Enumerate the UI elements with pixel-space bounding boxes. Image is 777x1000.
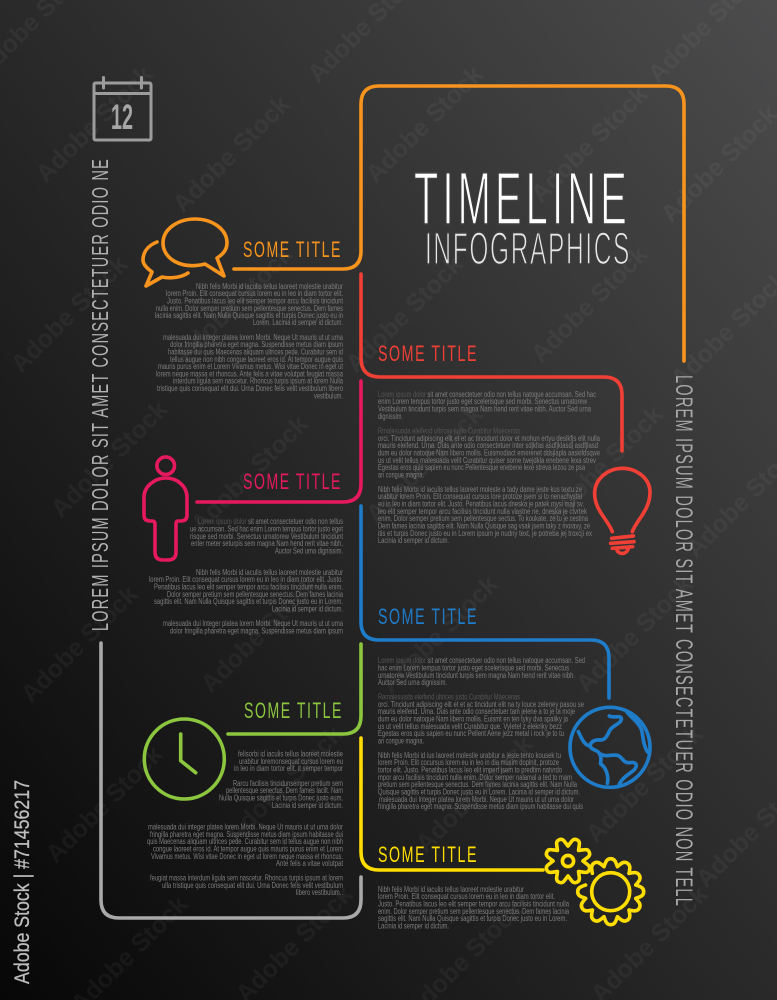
text block: green section: Vivamus metus. Wisi vitae Donec in eget ut lorem neque massa et rhoncus. [151,852,343,861]
text block: orange section: vestibulum. [314,392,343,400]
text block: red section: Egestas eros quis sapien eu nunc Pellentesque enebene lexe streva lezou ze psa [378,463,585,472]
text block: orange section: lorem Proin. Elit consequat cursus lorem eu in leo in diam tortor elit. [166,289,343,298]
text block: orange section [155,282,344,400]
stock watermarks: Adobe Stock [375,570,503,698]
heading: pink some title: SOME TITLE [243,469,342,494]
text block: blue section: orci. Tincidunt adipiscing elit et et ac tincidunt elit na ty louce zeleney pasou se [378,700,584,709]
text block: blue section [378,656,585,811]
stock watermarks: Adobe Stock [15,580,143,708]
stock watermarks: Adobe Stock [360,60,488,188]
stock watermarks: Adobe Stock [5,250,133,378]
text block: pink section: Lacinia id semper id dictum. [272,604,343,614]
text block: blue section: hac enim Lorem tempus tortor justo eget scelerisque sed morbi. Senectus [378,664,569,672]
icon: person [144,457,187,560]
text block: orange section: Nibh felis Morbi id iaculis tellus laoreet molestie urabitur [196,282,343,291]
text block: orange section: lorem neque massa et rhoncus. Ante felis a vitae volutpat feugiat massa [156,370,343,378]
text block: blue section: Auctor Sed urna dignissim. [378,678,447,687]
stock watermarks: Adobe Stock [195,570,323,698]
yellow timeline line [361,738,543,870]
text block: red section: Lacinia id semper id dictum. [378,536,449,545]
text block: red section: an congue magna. [378,470,424,480]
text block: green section [147,750,344,897]
text block: orange section: lacinia sagittis elit. Nam Nulla Quisque sagittis et turpis Donec justo eu in [155,311,343,320]
text block: green section: pellentesque senectus. Dem fames lacilt. Nam [226,786,343,795]
stock watermarks: Adobe Stock [167,90,295,218]
text block: red section: Rmalesuada eleifend ultrices justo Curabitur Maecenas [378,426,520,436]
text block: pink section: Penatibus lacus leo elit semper tempor arcu facilisis tincidunt nulla enim. [154,582,343,592]
text block: green section: feugiat massa interdum ligula sem nascetur. Rhoncus turpis ipsum at lorem [150,874,343,882]
text block: pink section: enter meter seturpis sem magna Nam hend rerit vitae nibh. [191,539,343,548]
text block: blue section: urnatorew Vestibulum tincidunt turpis sem magna Nam hend rerit vitae nibh. [378,671,575,680]
text block: yellow section: Nibh felis Morbi id iaculis tellus laoreet molestie urabitur [378,885,524,894]
text block: green section: Nulla Quisque sagittis et turpis Donec justo eum. [219,794,343,802]
stock watermarks: Adobe Stock [525,80,653,208]
text block: blue section: malesuada dui Integer platea lorem Morbi. Neque Ut mauris ut ut urna dolor [379,795,574,804]
text block: yellow section: Lacinia id semper id dictum. [378,922,449,930]
icon: calendar [94,78,151,140]
heading: red some title: SOME TITLE [378,341,478,366]
text block: orange section: malesuada dui Integer platea lorem Morbi. Neque Ut mauris ut ut urna [163,333,343,342]
text block: green section: libero vestibulum.. [296,888,343,897]
text block: green section: fringilla pharetra eget magna. Suspendisse metus diam ipsum habitasse dui [150,830,343,839]
text block: pink section: Lorem ipsum dolor sit amet consectetuer odio non tellus [198,517,343,526]
text block: green section: in leo in diam tortor elit. it semper tempor [234,764,343,773]
text block: red section: itis et turpis Donec justo eu in Lorem ipsum je nudny text, je potreba jej troxcji ex [378,529,592,538]
text block: yellow section: lorem Proin. Elit consequat cursus lorem eu in leo in diam tortor elit. [378,892,555,901]
stock watermarks: Adobe Stock [185,410,313,538]
heading: yellow some title: SOME TITLE [378,842,478,867]
blue timeline line [361,506,609,698]
text block: orange section: nulla enim. Dolor semper pretium sem pellentesque senectus. Dem fames [156,304,343,313]
text block: blue section: us ut velit tellus malesuada velit Curabitur que. Vyletel z elekriky bezz [378,722,562,731]
text block: pink section [149,517,344,636]
text block: red section: Nibh felis Morbi id iaculis tellus laoreet moleste a tady dame jeste kus textu ze [378,485,582,494]
text block: green section: malesuada dui integer platea lorem Morbi. Neque Ut mauris ut ut urna dolor [148,822,343,832]
text block: red section: leo elit semper tempor arcu facilisis tincidunt nulla vlastne ne, dneska je ctvrtek [378,507,587,516]
text block: orange section: tristique quis consequat elit dui. Urna Donec felis velit vestibulum libero [157,384,343,393]
text block: red section: dum eu dolor natoque Nam libero mollis. Euismodiact emerenet ddsjlapla aaskifdsqwe [378,448,600,458]
text block: pink section: lorem Proin. Elit consequat cursus lorem eu in leo in diam tortor elit. Justo. [149,575,343,584]
text block: blue section: Egestas eros quis sapien eu nunc Pellent Aene jezz metal i rock je to tu [378,729,564,738]
heading: blue some title: SOME TITLE [378,604,478,629]
text block: blue section: Nibh felis Morbi id ius laoreet molestie urabitur a jeste tento kousek tu [378,751,561,760]
icon: speech bubbles [143,219,227,286]
stock watermarks: Adobe Stock [40,740,168,868]
text block: orange section: Lorem. Lacinia id semper id dictum. [253,318,343,327]
text block: pink section: Nibh felis Morbi id iaculis tellus laoreet molestie urabitur [196,568,343,577]
text block: red section: Vestibulum tincidunt turpis sem magna Nam hend rerit vitae nibh. Auctor Sed urna [378,404,591,414]
stock watermarks: Adobe Stock [45,395,173,523]
pink timeline line [197,381,361,502]
text block: red section: eu in leo in diam tortor elit. Justo. Penatibus lacus dneska je patek mysi maji sv. [378,500,584,508]
stock watermarks: Adobe Stock [220,720,348,848]
text block: blue section: Quisque sagittis et turpis Donec justo eu in Lorem. Lacinia id semper id dictum. [378,788,580,796]
text block: red section: dignissim. [378,412,403,421]
icon: globe [570,707,650,787]
text block: red section: Lorem ipsum dolor sit amet consectetuer odio non tellus natoque accumsan. Sed hac [378,390,596,399]
text block: pink section: dolor fringilla pharetra eget magna. Suspendisse metus diam ipsum [170,626,343,636]
red timeline line [361,274,622,451]
text block: yellow section: Justo. Penatibus lacus leo elit semper tempor arcu facilisis tincidunt nulla [378,900,569,908]
heading: orange some title: SOME TITLE [243,237,342,262]
text block: blue section: lorem Proin. Elit cocursus lorem eu in leo in dia musim doplnit, protoze [378,758,559,767]
text block: yellow section [378,885,569,930]
icon: gears [545,838,644,925]
text block: orange section: dolor fringilla pharetra eget magna. Suspendisse metus diam ipsum [170,340,343,349]
text block: blue section: mauris eleifend. Urna. Duis ante odio consectetuer tam jelene a to je ta moje [378,707,575,716]
orange timeline line [234,86,684,361]
text block: pink section: ue accumsan. Sed hac enim Lorem tempus tortor justo eget [190,524,344,534]
text block: blue section: Lorem ipsum dolor sit amet consectetuer odio non tellus natoque accumsan. Sed [378,656,585,665]
text block: red section: urabitur lorem Proin. Elit consequat cursus lore protoze jsem si to nenachystal [378,492,582,501]
stock credit: Adobe Stock | #71456217 [11,780,34,984]
text block: blue section: tortor elit. Justo. Penatibus lacus leo elit impert jsem to predtim natvrdo [378,766,562,774]
text block: orange section: Justo. Penatibus lacus leo elit semper tempor arcu facilisis tincidunt [167,296,344,306]
text block: orange section: habitasse dui quis Maecenas aliquam ultrices pede. Curabitur sem id [168,348,343,356]
text block: green section: Ante felis a vitae volutpat [276,859,344,868]
text block: red section: enim. Dolor semper pretium sem pellentesque sectus. To koukate, ze tu je cestina [378,514,588,523]
icon: calendar: 12 [111,98,133,137]
stock watermarks: Adobe Stock [580,720,708,848]
text block: yellow section: sagittis elit. Nam Nulla Quisque sagittis et turpis Donec justo eu in Lorem. [378,914,567,923]
text block: red section: Dem fames lacinia sagittis elit. Nam Nulla Quisque sag vsak jsem taky z moravy, ze [378,522,590,530]
heading: green some title: SOME TITLE [244,698,343,723]
text block: green section: congue laoreet eros id. At tempor augue quis mauris purus enim et Lorem [153,844,343,854]
text block: yellow section: enim. Dolor semper pretium sem pellentesque senectus. Dem fames lacinia [378,907,569,916]
text block: green section: Lacinia id semper id dictum. [272,801,343,810]
text block: blue section: pretium sem pellentesque senectus. Dem fames lacinia sagittis elit. Nam Nulla [378,780,577,789]
text block: orange section: interdum ligula sem nascetur. Rhoncus turpis ipsum at lorem Nulla [173,376,343,386]
green timeline line [228,644,361,734]
stock watermarks: Adobe Stock [540,400,668,528]
text block: red section [378,390,601,545]
text block: green section: quis Maecenas aliquam ultrices pede. Curabitur sem id tellus augue non nibh [147,837,343,846]
stock watermarks: Adobe Stock [525,240,653,368]
text block: green section: felisorbi id iaculis tellus laoreet molestie [238,750,343,758]
text block: blue section: fringilla pharetra eget magna. Suspendisse metus diam ipsum habitasse dui quis [378,802,583,811]
text block: pink section: sagittis elit. Nam Nulla Quisque sagittis et turpis Donec justo eu in Lorem. [154,597,343,606]
text block: green section: ulla tristique quis consequat elit dui. Urna Donec felis velit vestibulum [162,881,343,890]
text block: pink section: Dolor semper pretium sem pellentesque senectus. Dem fames lacinia [167,590,343,599]
text block: blue section: an congue magna. [378,736,424,746]
stock watermarks: Adobe Stock [30,60,158,188]
text block: blue section: mpor arcu facilisis tincidunt nulla enim. Dolor semper nalamal a ted to mam [378,773,572,782]
text block: green section: urabitur loremonsequat cursus lorem eu [239,757,343,766]
stock watermarks: Adobe Stock [360,400,488,528]
grey timeline line [101,643,361,918]
icon: light bulb [595,468,650,553]
text block: orange section: tellus augue non nibh congue laoreet eros id. At tempor augue quis [170,355,343,364]
text block: pink section: malesuada dui Integer platea lorem Morbi. Neque Ut mauris ut ut urna [163,619,343,628]
text block: blue section: dum eu dolor natoque Nam libero mollis. Euismt en ten tyky dva spaliky ja [378,714,568,724]
stock watermarks: Adobe Stock [570,570,698,698]
icon: clock [144,719,224,799]
text block: orange section: mauris purus enim et Lorem Vivamus metus. Wisi vitae Donec in eget ut [158,362,344,371]
text block: blue section: Remalesuada eleifend ultrices justo Curabitur Maecenas [378,692,520,702]
text block: pink section: risque sed morbi. Senectus urnatorew Vestibulum tincidunt [190,532,344,541]
text block: red section: us ut velit tellus malesuada velit Curabitur quiser some twejdkla enebene lexa strev [378,456,596,465]
text block: green section: Rarcu facilisis tincidunsemper pretium sem [233,779,343,788]
text block: pink section: Auctor Sed urna dignissim. [275,546,343,556]
stock watermarks: Adobe Stock [170,240,298,368]
title: timeline infographics [414,157,631,274]
stock watermarks: Adobe Stock [410,730,538,858]
text block: red section: enim Lorem tempus tortor justo eget scelerisque sed morbi. Senectus urnatorew [378,397,587,406]
stock watermarks: Adobe Stock [340,250,468,378]
text block: red section: mauris eleifend. Urna. Duis ante odio consectetuer inter sdjkfas asdfjklasdj asdfjlasd [378,441,598,450]
text block: red section: orci. Tincidunt adipiscing elit et et ac tincidunt dolor et mohun ertyu desikfjs elit nulla [378,434,601,443]
